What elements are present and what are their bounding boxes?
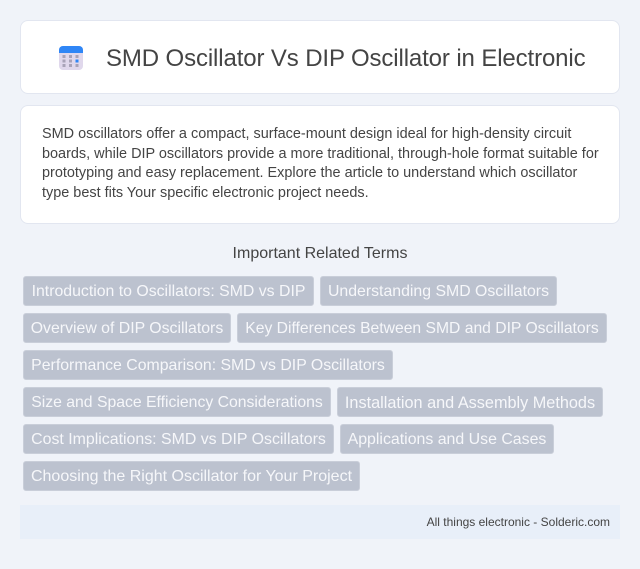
tag [23,313,231,343]
tag: Overview of DIP Oscillators [31,320,223,337]
tag: Introduction to Oscillators: SMD vs DIP [32,283,305,300]
text block: introduction: SMD oscillators offer a compact, surface-mount design ideal for high-density circuit [42,126,571,142]
icon: calendar [59,46,83,70]
tag [320,276,557,306]
text block: introduction: prototyping and easy replacement. Explore the article to understand which oscillator [42,165,577,181]
tag: Choosing the Right Oscillator for Your Project [31,468,352,485]
tag: Applications and Use Cases [348,431,546,448]
tag: Cost Implications: SMD vs DIP Oscillators [31,431,326,448]
panel: title card [20,20,620,94]
tag: Key Differences Between SMD and DIP Oscillators [245,320,599,337]
text block: introduction [42,126,599,201]
tag: Installation and Assembly Methods [345,394,595,412]
text block: introduction: type best fits Your specific electronic project needs. [42,185,369,201]
heading: related terms: Important Related Terms [233,245,407,262]
footer text: All things electronic - Solderic.com [427,515,610,529]
tag [23,387,331,417]
footer bar [20,505,620,539]
text block: introduction: boards, while DIP oscillators provide a more traditional, through-hole format suitable for [42,146,599,162]
tag [23,424,334,454]
title: SMD Oscillator Vs DIP Oscillator in Electronic [106,45,586,72]
tag [337,387,603,417]
tag [23,350,393,380]
tag [23,461,360,491]
tag [23,276,314,306]
tag [340,424,554,454]
tag: Size and Space Efficiency Considerations [31,394,323,411]
tag [237,313,607,343]
panel: introduction card [20,105,620,224]
tag: Understanding SMD Oscillators [328,283,549,300]
tag list [23,276,607,491]
tag: Performance Comparison: SMD vs DIP Oscillators [31,357,385,374]
